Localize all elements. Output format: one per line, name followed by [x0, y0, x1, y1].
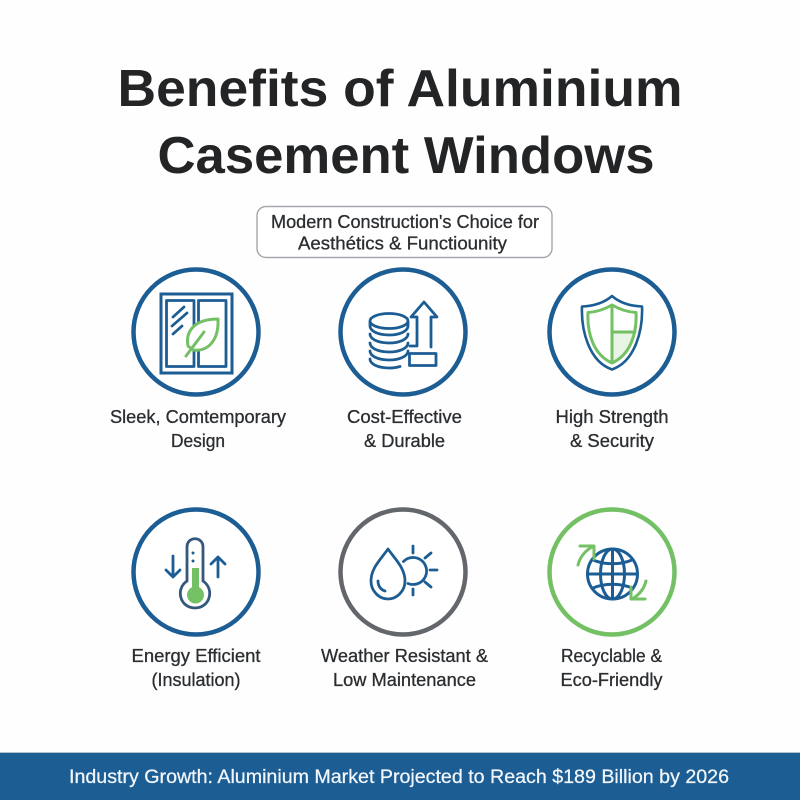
panel: strength	[550, 270, 674, 451]
panel: cost-effective	[340, 270, 466, 451]
label: Sleek, Comtemporary	[110, 407, 286, 427]
footer banner: Industry Growth: Aluminium Market Projected to Reach $189 Billion by 2026	[69, 767, 729, 788]
label: Weather Resistant &	[321, 646, 488, 666]
label: Cost-Effective	[347, 407, 462, 427]
icon: shield	[550, 270, 674, 394]
panel: weather	[321, 510, 488, 690]
label: & Security	[570, 431, 654, 451]
label: Low Maintenance	[333, 670, 476, 690]
title	[118, 60, 682, 185]
icon: globe with arrows	[550, 510, 674, 634]
icon: drop and sun	[340, 510, 466, 634]
label	[347, 407, 462, 451]
subtitle box: Modern Construction's Choice for	[271, 212, 539, 232]
label: Design	[171, 431, 225, 451]
icon: window with leaf	[134, 270, 258, 394]
footer banner	[0, 752, 800, 800]
label: (Insulation)	[152, 670, 240, 690]
label	[560, 646, 662, 690]
title: Benefits of Aluminium	[118, 60, 682, 118]
icon: coins and arrow	[340, 270, 466, 394]
label: Recyclable &	[561, 646, 662, 666]
label: & Durable	[364, 431, 445, 451]
subtitle box	[257, 206, 552, 258]
label	[321, 646, 488, 690]
label: Energy Efficient	[132, 646, 260, 666]
icon: thermometer	[134, 510, 258, 634]
label: Eco-Friendly	[560, 670, 662, 690]
label	[556, 407, 668, 451]
title: Casement Windows	[158, 127, 654, 185]
subtitle box: Aesthétics & Functiounity	[298, 234, 507, 254]
panel: energy	[132, 510, 260, 690]
label	[132, 646, 260, 690]
label	[110, 407, 286, 451]
panel: recyclable	[550, 510, 674, 690]
label: High Strength	[556, 407, 668, 427]
panel: sleek design	[110, 270, 286, 451]
